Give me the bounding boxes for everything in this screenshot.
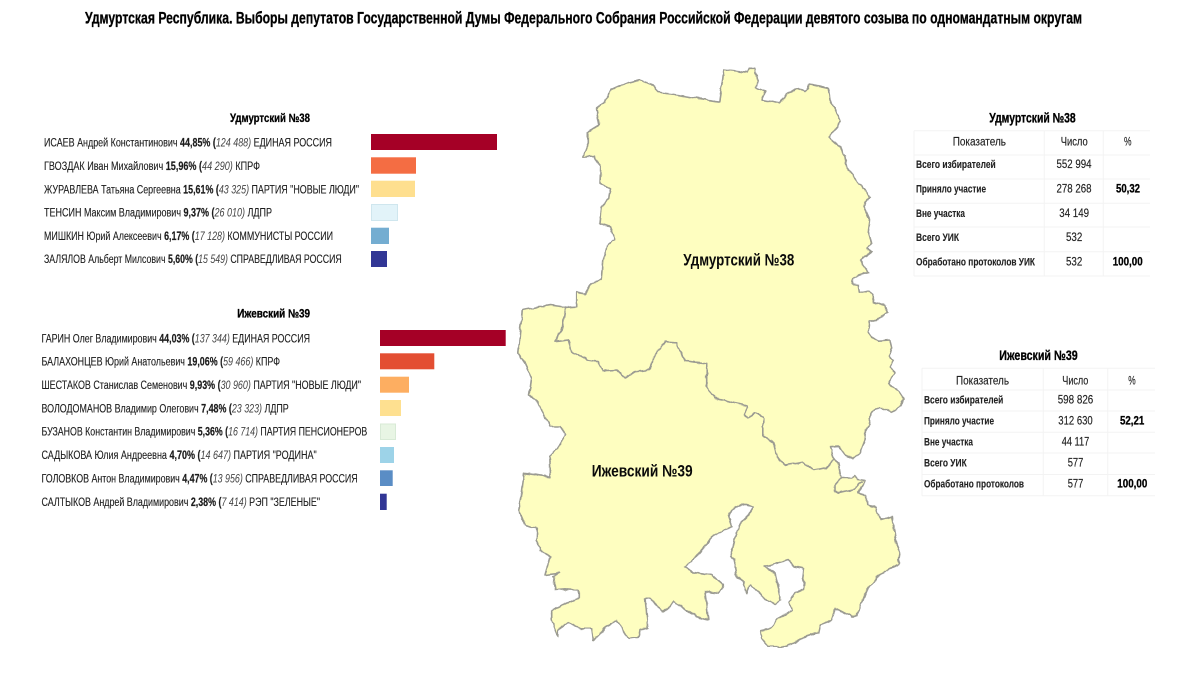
table row: off-site: Вне участка — [916, 208, 966, 220]
candidate row: Buzanov: БУЗАНОВ Константин Владимирович 5,36% (16 714) ПАРТИЯ ПЕНСИОНЕРОВ — [42, 426, 368, 438]
candidate row: Shestakov: ШЕСТАКОВ Станислав Семенович 9,93% (30 960) ПАРТИЯ "НОВЫЕ ЛЮДИ" — [42, 380, 361, 392]
candidate row: Tensin — [44, 204, 398, 220]
table row: turnout: Приняло участие — [924, 415, 994, 427]
candidate row: Saltykov — [42, 494, 387, 510]
table row: turnout: 50,32 — [1116, 184, 1140, 196]
table row: protocols: 532 — [1066, 256, 1082, 268]
map label: Izhevsky: Ижевский №39 — [592, 462, 693, 480]
table heading: Ижевский №39 — [999, 348, 1078, 363]
map: district boundary — [555, 307, 835, 470]
table row: turnout — [924, 415, 1145, 427]
candidate row: Garin — [42, 330, 506, 346]
table row: turnout: 52,21 — [1120, 415, 1145, 427]
candidate row: Garin: ГАРИН Олег Владимирович 44,03% (137 344) ЕДИНАЯ РОССИЯ — [42, 333, 310, 345]
table row: off-site: 34 149 — [1059, 208, 1089, 220]
table row: commissions — [924, 458, 1083, 470]
panel: results Izhevsky 39 — [42, 306, 506, 510]
table heading: Удмуртский №38 — [989, 110, 1076, 126]
table header row — [953, 137, 1132, 149]
candidate row: Balakhontsev: БАЛАХОНЦЕВ Юрий Анатольевич 19,06% (59 466) КПРФ — [42, 356, 280, 368]
candidate row: Volodomanov — [42, 400, 401, 416]
table header row: Число — [1062, 375, 1088, 387]
table row: commissions: 532 — [1066, 232, 1082, 244]
table row: voters — [916, 159, 1092, 171]
candidate row: Gvozdak — [44, 157, 416, 174]
table row: protocols: 100,00 — [1117, 478, 1147, 490]
table row: voters: Всего избирателей — [924, 394, 1003, 406]
candidate row: Mishkin: МИШКИН Юрий Алексеевич 6,17% (17 128) КОММУНИСТЫ РОССИИ — [44, 231, 333, 243]
table row: voters: 598 826 — [1058, 394, 1093, 406]
candidate row: Mishkin — [44, 228, 389, 244]
table header row: Показатель — [953, 137, 1006, 149]
candidate row: Saltykov: САЛТЫКОВ Андрей Владимирович 2,38% (7 414) РЭП "ЗЕЛЕНЫЕ" — [42, 497, 320, 509]
table row: off-site: Вне участка — [924, 436, 974, 448]
table row: turnout: 312 630 — [1058, 415, 1093, 427]
table header row: Показатель — [956, 375, 1009, 387]
candidate row: Isaev — [44, 134, 497, 150]
candidate row: Sadykova: САДЫКОВА Юлия Андреевна 4,70% (14 647) ПАРТИЯ "РОДИНА" — [42, 450, 317, 462]
candidate row: Zalyalov: ЗАЛЯЛОВ Альберт Милсович 5,60% (15 549) СПРАВЕДЛИВАЯ РОССИЯ — [44, 254, 342, 266]
table row: off-site — [924, 436, 1089, 448]
table row: protocols: 577 — [1068, 478, 1083, 490]
table row: voters — [924, 394, 1093, 406]
table row: protocols — [916, 256, 1143, 268]
table row: turnout: 278 268 — [1056, 184, 1092, 196]
table row: commissions: Всего УИК — [916, 232, 959, 244]
table row: commissions: Всего УИК — [924, 458, 967, 470]
table header row: % — [1124, 137, 1132, 149]
candidate row: Zhuravleva: ЖУРАВЛЕВА Татьяна Сергеевна 15,61% (43 325) ПАРТИЯ "НОВЫЕ ЛЮДИ" — [44, 184, 359, 196]
candidate row: Golovkov: ГОЛОВКОВ Антон Владимирович 4,47% (13 956) СПРАВЕДЛИВАЯ РОССИЯ — [42, 473, 358, 485]
table row: commissions: 577 — [1068, 458, 1083, 470]
map: region outline — [518, 68, 904, 647]
table row: commissions — [916, 232, 1082, 244]
map of Udmurtia — [518, 68, 904, 647]
table row: protocols: Обработано протоколов УИК — [916, 256, 1035, 268]
candidate row: Zhuravleva — [44, 181, 415, 197]
table row: turnout: Приняло участие — [916, 184, 986, 196]
panel: results Udmurtsky 38 — [44, 111, 497, 267]
table row: voters: Всего избирателей — [916, 159, 996, 171]
candidate row: Tensin: ТЕНСИН Максим Владимирович 9,37% (26 010) ЛДПР — [44, 207, 272, 219]
map: oxbow line — [835, 478, 862, 493]
table header row — [956, 375, 1136, 387]
table row: protocols: Обработано протоколов — [924, 478, 1024, 490]
candidate row: Balakhontsev — [42, 353, 434, 369]
table: Udmurtsky 38 turnout — [914, 110, 1150, 276]
table: Izhevsky 39 turnout — [922, 348, 1155, 496]
candidate row: Isaev: ИСАЕВ Андрей Константинович 44,85% (124 488) ЕДИНАЯ РОССИЯ — [44, 137, 332, 149]
candidate row: Volodomanov: ВОЛОДОМАНОВ Владимир Олегович 7,48% (23 323) ЛДПР — [42, 403, 289, 415]
table row: protocols: 100,00 — [1113, 256, 1143, 268]
candidate row: Sadykova — [42, 447, 394, 463]
heading: Ижевский №39 — [237, 306, 310, 320]
table row: voters: 552 994 — [1056, 159, 1092, 171]
table row: turnout — [916, 184, 1140, 196]
map: region shapes — [518, 68, 904, 647]
table header row: % — [1128, 375, 1136, 387]
candidate row: Gvozdak: ГВОЗДАК Иван Михайлович 15,96% (44 290) КПРФ — [44, 161, 260, 173]
table header row: Число — [1061, 137, 1088, 149]
table row: protocols — [924, 478, 1147, 490]
map label: Udmurtsky: Удмуртский №38 — [683, 252, 794, 270]
table row: off-site: 44 117 — [1062, 436, 1089, 448]
table row: off-site — [916, 208, 1089, 220]
heading: Удмуртский №38 — [230, 111, 310, 125]
